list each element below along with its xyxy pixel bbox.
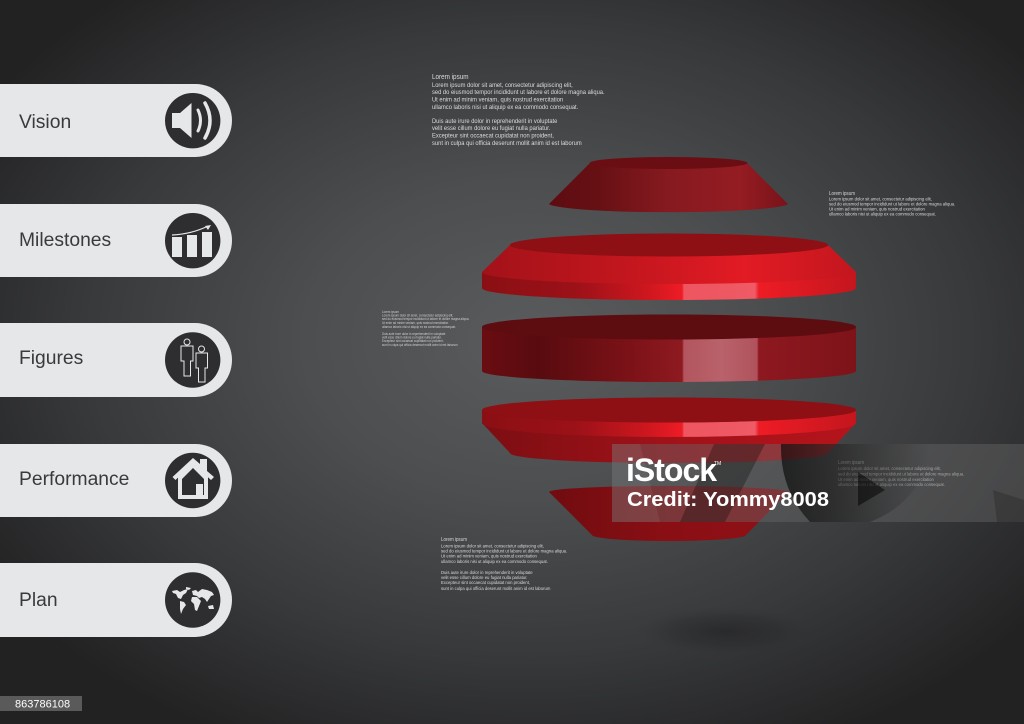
- floor shadow: [635, 606, 815, 656]
- text block: left: [382, 310, 469, 347]
- slice 3: middle cylinder: [482, 314, 856, 382]
- slice 1: top cone: [549, 157, 788, 212]
- text block: top: velit esse cillum dolore eu fugiat nulla pariatur.: [432, 125, 551, 132]
- text block: right: ullamco laboris nisi ut aliquip ex ea commodo consequat.: [829, 211, 936, 217]
- image id tag: [0, 696, 82, 711]
- image id tag: 863786108: [15, 698, 70, 710]
- text block: left: Ut enim ad minim veniam, quis nostrud exercitation: [382, 321, 449, 325]
- icon: two people: [165, 332, 220, 388]
- label: Figures: Figures: [19, 348, 83, 369]
- text block: top: Duis aute irure dolor in reprehenderit in voluptate: [432, 118, 558, 125]
- text block: bottom: Excepteur sint occaecat cupidatat non proident,: [441, 580, 530, 585]
- text block: left: Lorem ipsum dolor sit amet, consectetur adipiscing elit,: [382, 313, 453, 318]
- text block: right: Lorem ipsum dolor sit amet, consectetur adipiscing elit,: [829, 196, 932, 202]
- text block: right lower: Lorem ipsum dolor sit amet, consectetur adipiscing elit,: [838, 466, 941, 471]
- slice 2 rim: [482, 272, 856, 300]
- icon: world map: [165, 572, 220, 628]
- icon: growth chart: [165, 213, 220, 268]
- slice 3 top face: [482, 314, 856, 340]
- slice 4 rim: [482, 410, 856, 437]
- icon: speaker: [165, 93, 220, 148]
- text block: bottom: ullamco laboris nisi ut aliquip ex ea commodo consequat.: [441, 559, 548, 564]
- text block: bottom: Ut enim ad minim veniam, quis nostrud exercitation: [441, 553, 537, 559]
- slice 5: bottom cone: [549, 486, 788, 541]
- watermark band: [612, 444, 1024, 522]
- text block: right: [829, 191, 955, 217]
- label: Performance: Performance: [19, 469, 129, 490]
- slice 4: lower ring: [482, 398, 856, 463]
- text block: right lower: Lorem ipsum: [838, 460, 864, 466]
- watermark logo: iStock: [626, 452, 717, 488]
- text block: left: Duis aute irure dolor in reprehenderit in voluptate: [382, 332, 446, 336]
- text block: top: Ut enim ad minim veniam, quis nostrud exercitation: [432, 96, 563, 104]
- text block: top: Excepteur sint occaecat cupidatat non proident,: [432, 132, 554, 140]
- text block: top: Lorem ipsum: [432, 74, 469, 81]
- text block: right lower: sed do eiusmod tempor incididunt ut labore et dolore magna aliqua.: [838, 471, 964, 477]
- label: Plan: Plan: [19, 590, 58, 611]
- text block: top: sed do eiusmod tempor incididunt ut labore et dolore magna aliqua.: [432, 89, 605, 96]
- text block: top: Lorem ipsum dolor sit amet, consectetur adipiscing elit,: [432, 82, 573, 89]
- text block: right: sed do eiusmod tempor incididunt ut labore et dolore magna aliqua.: [829, 201, 955, 207]
- panel: Figures: [0, 323, 232, 397]
- text block: top: ullamco laboris nisi ut aliquip ex ea commodo consequat.: [432, 104, 579, 111]
- trademark: TM: [714, 461, 721, 467]
- label: Vision: Vision: [19, 112, 71, 133]
- text block: bottom: velit esse cillum dolore eu fugiat nulla pariatur.: [441, 575, 527, 580]
- panel: Milestones: [0, 204, 232, 277]
- text block: left: ullamco laboris nisi ut aliquip ex ea commodo consequat.: [382, 325, 456, 329]
- text block: top: sunt in culpa qui officia deserunt mollit anim id est laborum: [432, 140, 582, 147]
- panel: Performance: [0, 444, 232, 517]
- text block: top: [432, 74, 605, 147]
- watermark credit: Credit: Yommy8008: [627, 489, 829, 511]
- text block: right lower: ullamco laboris nisi ut aliquip ex ea commodo consequat.: [838, 482, 945, 487]
- text block: bottom: Duis aute irure dolor in reprehenderit in voluptate: [441, 570, 533, 575]
- text block: right lower: [838, 460, 964, 487]
- panel: Plan: [0, 563, 232, 637]
- icon: house: [165, 453, 220, 508]
- slice 2 top face: [510, 234, 828, 256]
- text block: left: sed do eiusmod tempor incididunt ut labore et dolore magna aliqua.: [382, 317, 469, 321]
- panel: Vision: [0, 84, 232, 157]
- text block: right: Ut enim ad minim veniam, quis nostrud exercitation: [829, 206, 925, 212]
- text block: right lower: Ut enim ad minim veniam, quis nostrud exercitation: [838, 477, 934, 482]
- label: Milestones: Milestones: [19, 230, 111, 251]
- slice 1 top face: [590, 157, 748, 169]
- text block: bottom: [441, 537, 567, 591]
- text block: left: Excepteur sint occaecat cupidatat non proident,: [382, 339, 444, 343]
- slice 4 top face: [482, 398, 856, 422]
- text block: right: Lorem ipsum: [829, 191, 855, 197]
- text block: left: sunt in culpa qui officia deserunt mollit anim id est laborum: [382, 343, 458, 347]
- text block: bottom: sunt in culpa qui officia deserunt mollit anim id est laborum: [441, 586, 551, 591]
- text block: bottom: sed do eiusmod tempor incididunt ut labore et dolore magna aliqua.: [441, 548, 567, 554]
- text block: bottom: Lorem ipsum: [441, 537, 467, 543]
- text block: left: Lorem ipsum: [382, 310, 399, 314]
- text block: left: velit esse cillum dolore eu fugiat nulla pariatur.: [382, 335, 442, 340]
- text block: bottom: Lorem ipsum dolor sit amet, consectetur adipiscing elit,: [441, 543, 544, 549]
- slice 2: upper ring: [482, 234, 856, 300]
